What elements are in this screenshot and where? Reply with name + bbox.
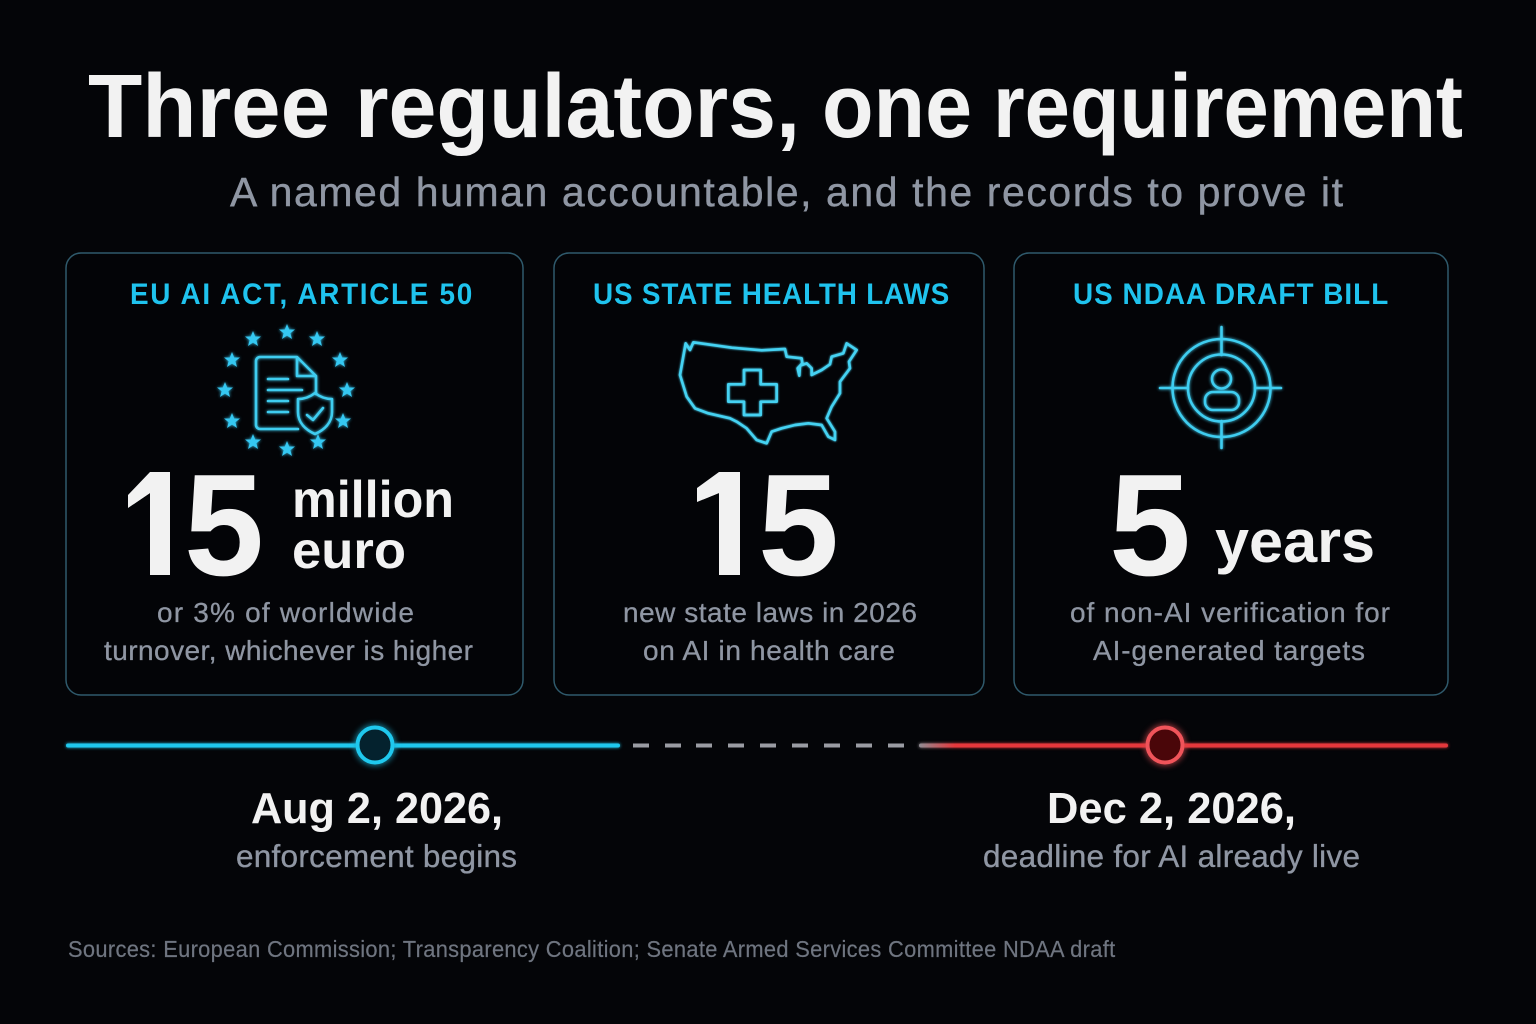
date label: December: deadline for AI already live <box>983 838 1360 874</box>
stat: 15: 1 <box>125 444 193 606</box>
stat unit: million euro <box>292 471 454 580</box>
title: one <box>822 57 972 157</box>
timeline segment: cyan <box>66 744 620 748</box>
title: Three <box>88 57 330 157</box>
date label: August: enforcement begins <box>236 838 517 874</box>
icon: US map with medical cross <box>680 342 857 443</box>
stat: 15 <box>697 472 835 576</box>
heading: EU AI Act: EU AI ACT, ARTICLE 50 <box>130 278 472 311</box>
date label: December: Dec 2, 2026, <box>1047 784 1296 833</box>
stat unit: years: years <box>1215 508 1375 575</box>
date label: December <box>983 784 1360 874</box>
date label: August: Aug 2, 2026, <box>251 784 503 833</box>
description <box>1070 597 1390 666</box>
stat: 15: 5 <box>758 444 839 606</box>
marker: December <box>1148 728 1182 762</box>
description: new state laws in 2026 <box>623 597 917 628</box>
title <box>88 57 1463 157</box>
description <box>623 597 917 666</box>
title: requirement <box>993 57 1463 157</box>
stat: 5: 5 <box>1109 444 1191 606</box>
panel: US state health laws <box>554 253 984 695</box>
stat unit: million euro: million <box>292 471 454 529</box>
heading: US state health laws: US STATE HEALTH LAWS <box>593 278 949 311</box>
description: or 3% of worldwide <box>157 597 414 628</box>
description: of non-AI verification for <box>1070 597 1390 628</box>
description: AI-generated targets <box>1093 635 1365 666</box>
description: on AI in health care <box>643 635 895 666</box>
stat unit: million euro: euro <box>292 522 406 580</box>
title: regulators, <box>355 57 800 157</box>
timeline <box>66 728 1448 762</box>
icon: document with shield inside EU stars <box>217 324 355 456</box>
icon: crosshair target with person <box>1160 327 1281 448</box>
timeline segment: red <box>919 744 1448 748</box>
marker: August <box>358 728 392 762</box>
stat: 15: 1 <box>695 444 763 606</box>
stat: 15: 5 <box>184 444 264 606</box>
heading: US NDAA draft bill: US NDAA DRAFT BILL <box>1073 278 1388 311</box>
description: turnover, whichever is higher <box>104 635 473 666</box>
panel: EU AI Act <box>66 253 523 695</box>
sources: Sources: European Commission; Transparency Coalition; Senate Armed Services Committee NDAA draft <box>68 935 1116 962</box>
stat: 15 <box>128 472 260 576</box>
subtitle: A named human accountable, and the records to prove it <box>230 169 1344 215</box>
panel: US NDAA draft bill <box>1014 253 1448 695</box>
description <box>104 597 473 666</box>
date label: August <box>236 784 517 874</box>
timeline segment: dashed gap <box>633 744 904 748</box>
